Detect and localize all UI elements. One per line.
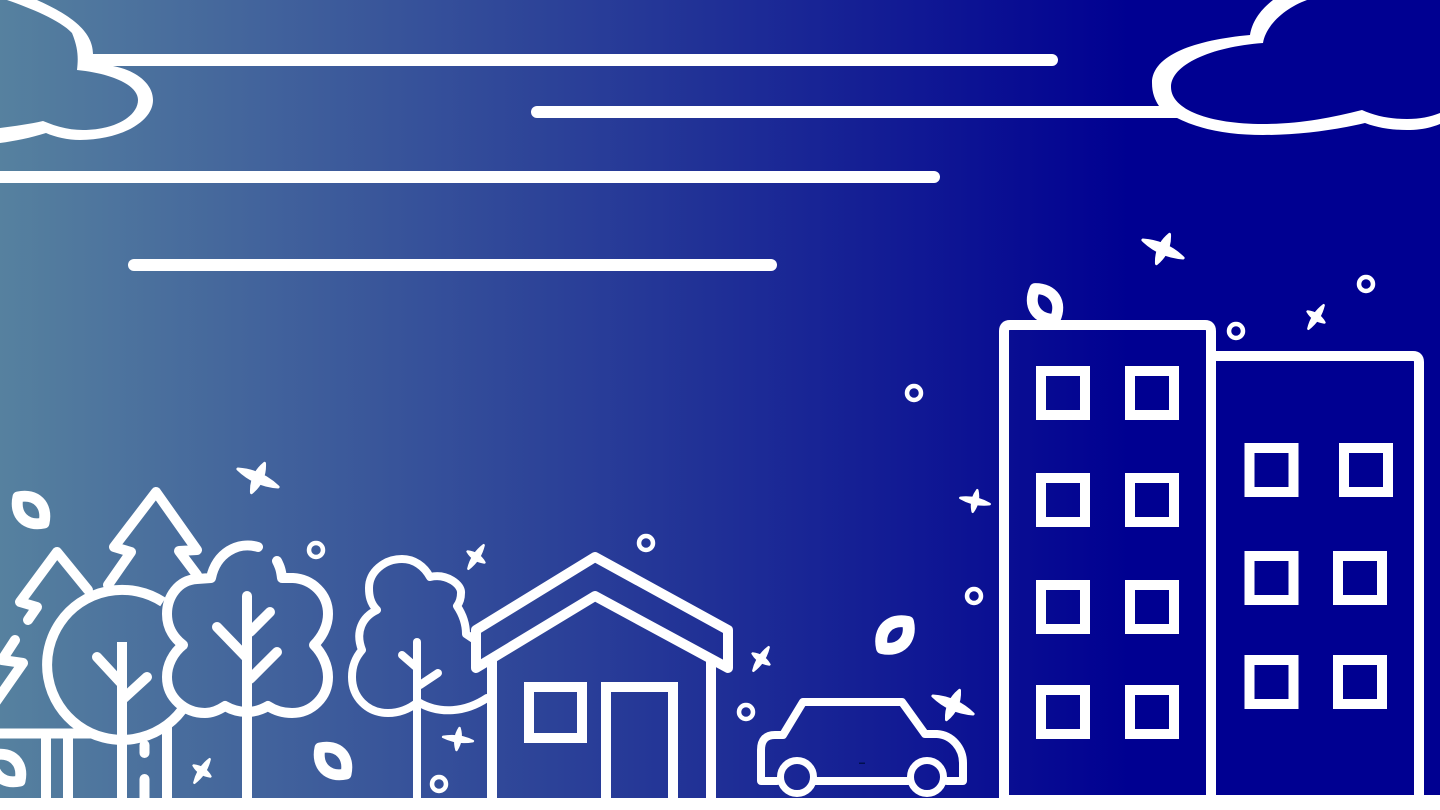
car wheel: right: [910, 760, 944, 794]
building: shorter right: [1211, 356, 1419, 800]
ring: top right: [1359, 277, 1373, 291]
building: tall left: [1004, 325, 1211, 800]
buildings: [1004, 325, 1419, 800]
sparkle: under house tree: [442, 726, 474, 752]
leaf: lower middle: [319, 747, 347, 775]
fence: [0, 727, 167, 800]
car: [761, 702, 963, 794]
leaf: top left: [17, 496, 45, 524]
sparkle: left of building: [958, 487, 992, 515]
wind lines: [0, 60, 1180, 265]
windows: tall building: [1041, 371, 1174, 734]
house walls: [492, 660, 711, 798]
sparkle: right of house: [745, 642, 777, 676]
sparkle: above tree: [460, 540, 492, 574]
windows: shorter building: [1250, 448, 1388, 704]
ground strip: [0, 795, 1440, 810]
car body: [761, 702, 963, 781]
small dark mark on car: [859, 762, 865, 764]
sparkle: roof right: [1300, 300, 1332, 334]
small rings: [309, 277, 1373, 791]
car wheel: left: [780, 760, 814, 794]
sparkle: large above buildings: [1136, 225, 1190, 273]
ring: right of house: [739, 705, 753, 719]
leaves: [0, 496, 909, 782]
ring: under house tree: [432, 777, 446, 791]
tree: conifer back right: [108, 492, 197, 585]
leaf: on tall building: [1029, 288, 1061, 320]
sparkle: under round tree: [186, 754, 218, 788]
house window: [529, 687, 582, 738]
cloud: right: [1152, 0, 1440, 135]
ring: left of building upper: [907, 386, 921, 400]
tree: bumpy crown: [167, 545, 328, 798]
house: [476, 557, 728, 798]
house door: [606, 687, 673, 798]
cloud: left: [0, 0, 153, 143]
ring: left of building lower: [967, 589, 981, 603]
sparkle: large above trees: [231, 454, 285, 502]
car underside: [815, 777, 908, 785]
trees: left group: [0, 492, 328, 800]
sparkles: [186, 225, 1332, 788]
tree: beside house: [352, 559, 487, 798]
tree: round: [47, 590, 182, 798]
house roof: [476, 557, 728, 668]
ring: beside bumpy tree: [309, 543, 323, 557]
leaf: lower left: [0, 754, 21, 782]
tree: conifer back left: [0, 552, 88, 703]
ring: above house: [639, 536, 653, 550]
ring: between buildings: [1229, 324, 1243, 338]
leaf: above car: [881, 621, 909, 649]
sparkle: large near car: [926, 681, 980, 729]
